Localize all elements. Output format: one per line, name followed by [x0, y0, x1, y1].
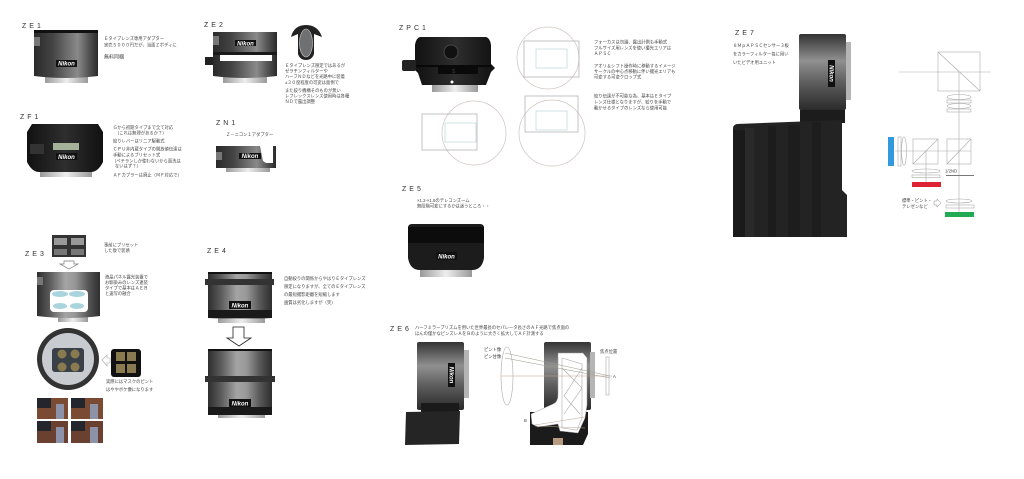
text: ZPC1 notes: フォーカスは勿論、露出計側も手動式 — [594, 38, 668, 46]
image: preset mask lens — [52, 235, 86, 257]
section: ZE6 — [390, 324, 618, 445]
lens: ZE2 adapter: Nikon — [237, 42, 254, 48]
heading: ZE5: ZE5 — [402, 186, 424, 193]
lens: ZF1 adapter: Nikon — [58, 155, 75, 161]
text: ZE6 notes — [415, 324, 569, 337]
lens: ZE1 adapter: Nikon — [58, 62, 75, 68]
lens: ZE4 long extension — [205, 349, 275, 418]
text: ZE7 notes: をカラーフィルター毎に用い — [733, 50, 789, 58]
heading: ZPC1: ZPC1 — [399, 25, 429, 32]
section: ZN1 — [216, 120, 276, 172]
diagram: ZE6 AF optical cutaway — [484, 342, 618, 445]
text: LCD note — [105, 274, 149, 297]
text: ZE6 notes: ハーフミラープリズムを用いた世界最長のセパレータ長さのＡＦ光路で焦点面の — [415, 324, 569, 331]
text: ZE6 notes: ほんの僅かなピンズレＡをＢのように大きく拡大してＡＦ計測する — [415, 330, 544, 337]
text: ZE4 notes: 自動絞りの関係からやはりＥタイプレンズ — [284, 275, 366, 282]
text: ZE4 notes: 限定になりますが、全てのＥタイプレンズ — [284, 283, 366, 290]
text: ZE2 notes: また絞り機構そのものが無い — [285, 87, 341, 94]
lens: ZE4 short extension — [205, 272, 274, 323]
diagram: ZE6 AF optical cutaway: A — [613, 374, 616, 379]
section: ZE3 — [25, 235, 153, 443]
section: ZE2 — [204, 22, 350, 105]
lens: ZE5 teleconverter: Nikon — [438, 254, 455, 260]
section: ZPC1 — [399, 25, 676, 166]
text: ZN1 caption: Ｚ－ニコン１アダプター — [226, 131, 273, 138]
text: mask note: 実際にはマスクのピント — [106, 378, 153, 385]
icon: filter holder — [291, 25, 322, 60]
text: ZF1 notes: ＣＰＵ非内蔵タイプの開放値伝達は — [113, 146, 182, 152]
text: ZF1 notes: （これは無理があるか？） — [115, 130, 167, 136]
text: ZE1 notes — [104, 35, 177, 60]
text: ZF1 notes — [112, 124, 182, 178]
text: mask note: はややボケ像になります — [106, 386, 153, 393]
body: ZE7 video unit — [733, 120, 847, 237]
text: ZE1 notes: 無料同梱 — [104, 54, 124, 60]
lens: ZPC1 tilt shift adapter — [402, 37, 495, 92]
heading: ZE7: ZE7 — [735, 30, 757, 37]
lens: ZE7 unit: Nikon — [828, 65, 834, 82]
heading: ZF1: ZF1 — [20, 114, 41, 121]
text: ZF1 notes: 手動によるプリセット式 — [113, 152, 161, 158]
arrow: left — [102, 355, 110, 366]
images: four sample photos — [37, 398, 103, 443]
section: ZE1 — [22, 23, 177, 83]
lens: ZPC1 tilt shift adapter: S — [452, 69, 456, 75]
lens: ZE6 side view: Nikon — [448, 367, 454, 384]
section: ZE7 — [733, 30, 991, 237]
lens: ZE3 adapter with LCD — [37, 272, 100, 322]
lens: rear view — [37, 328, 99, 390]
text: ZE7 notes: ８ＭｐＡＰＳＣセンサー３板 — [733, 42, 790, 49]
text: ZPC1 notes — [594, 38, 676, 112]
text: mask note — [106, 378, 153, 393]
text: ZPC1 notes: サークルの中心点移動に伴い撮光エリアも — [594, 68, 676, 75]
lens: ZE7 unit — [799, 34, 851, 123]
text: ZPC1 notes: レンズ仕様となりますが、絞りを手動で — [594, 98, 671, 106]
text: ZE4 notes: 画質は劣化しますが（笑） — [284, 299, 336, 306]
diagram: ZE6 AF optical cutaway: B — [524, 418, 527, 423]
heading: ZE4: ZE4 — [207, 248, 229, 255]
heading: ZN1: ZN1 — [216, 120, 238, 127]
lens: ZN1 adapter: Nikon — [242, 154, 259, 160]
text: LCD note: 液晶パネル露光装置で — [105, 274, 148, 280]
lens: ZF1 adapter — [27, 124, 103, 177]
lens: ZE4 long extension: Nikon — [232, 402, 249, 408]
text: ZE2 notes: ±３０度程度の可変は面倒で — [285, 79, 339, 86]
section: ZE4 — [205, 248, 366, 418]
text: ZE7 notes: いたビデオ用ユニット — [733, 59, 776, 66]
heading: ZE3: ZE3 — [25, 251, 47, 258]
text: ZF1 notes: （ベテランしか使わないから面洗は — [112, 158, 181, 164]
text: ZF1 notes: ないはず？） — [115, 162, 141, 170]
text: ZPC1 notes: ＡＰＳＣ — [594, 51, 611, 56]
section: ZE5 — [402, 186, 490, 277]
text: ZE5 notes: ×1.2-×1.5のテレコンズーム — [417, 197, 470, 204]
text: ZPC1 notes: アオリ＆シフト操作時に移動するイメージ — [594, 62, 676, 70]
text: LCD note: お馴染みのレンズ連装 — [105, 279, 149, 286]
text: ZF1 notes: 絞りレバーはリニア駆動式 — [113, 138, 165, 144]
text: ZE2 notes: ハーフＮＤなどを光路中に装着 — [285, 73, 346, 80]
heading: ZE1: ZE1 — [22, 23, 44, 30]
arrow: extend down — [227, 327, 251, 346]
text: ZE1 notes: 実売５０００円だが、当面Ｚボディに — [104, 42, 177, 48]
arrow: down — [60, 261, 78, 269]
diagram: ZE6 AF optical cutaway: 焦点位置 — [600, 348, 618, 355]
text: ZE4 notes — [284, 275, 366, 306]
heading: ZE2: ZE2 — [204, 22, 226, 29]
text: ZE5 notes: 無段階可変にするかは迷うところ・・ — [417, 202, 490, 210]
text: LCD note: と速写の融合 — [105, 290, 131, 297]
text: ZE1 notes: Ｅタイプレンズ専用アダプター — [104, 35, 164, 42]
text: ZF1 notes: ＡＦカプラーは廃止（ＭＦ対応で） — [113, 172, 182, 178]
lens: ZE1 adapter — [34, 30, 98, 83]
icon: quad mask — [111, 349, 141, 377]
text: preset note: 事前にプリセット — [104, 242, 138, 248]
text: LCD note: タイプで基本はＡＥＢ — [105, 284, 148, 292]
text: ZE2 notes: Ｅタイプレンズ限定ではあるが — [285, 62, 346, 69]
diagram: sensor coverage shift vertical — [519, 96, 585, 166]
lens: ZE2 adapter — [205, 32, 277, 83]
text: ZE2 notes — [285, 62, 350, 105]
diagram: optical path: テレゼンなど — [902, 203, 928, 210]
diagram: ZE6 AF optical cutaway: ピン甘像 — [484, 353, 502, 360]
diagram: sensor coverage shift horizontal — [422, 101, 506, 165]
diagram: optical path — [888, 52, 991, 217]
text: ZPC1 notes: 動かせるタイプのレンズなら使用可能 — [594, 104, 668, 112]
text: preset note — [104, 242, 138, 254]
lens: ZE6 side view — [405, 342, 469, 445]
lens: ZE4 short extension: Nikon — [232, 304, 249, 310]
text: ZE4 notes: の最短撮影距離を短縮します — [284, 291, 340, 298]
text: ZPC1 notes: フルサイズ用レンズを使い撮光エリアは — [594, 44, 672, 52]
diagram: optical path: 1/2ND — [945, 168, 957, 174]
text: ZF1 notes: Ｇから初期タイプまで全て対応 — [113, 124, 174, 131]
heading: ZE6: ZE6 — [390, 326, 412, 333]
diagram: optical path: 標準・ピント・ — [902, 197, 932, 204]
diagram: ZE6 AF optical cutaway: ピント像 — [484, 346, 502, 352]
text: ZE2 notes: レフレックスレンズ使用時は各種 — [285, 92, 350, 100]
text: ZE2 notes: ゼラチンフィルターや — [285, 68, 328, 74]
diagram: sensor coverage centered — [517, 27, 579, 89]
text: ZE7 notes — [733, 42, 790, 66]
text: ZPC1 notes: 絞り伝達が不可能な為、基本はＥタイプ — [594, 92, 672, 100]
text: ZPC1 notes: 可変する可変クロップ式 — [594, 74, 642, 80]
section: ZF1 — [20, 114, 182, 178]
text: preset note: した後で装填 — [104, 247, 130, 254]
text: ZE5 notes — [417, 197, 490, 210]
text: ZE2 notes: ＮＤで露出調整 — [285, 98, 316, 105]
